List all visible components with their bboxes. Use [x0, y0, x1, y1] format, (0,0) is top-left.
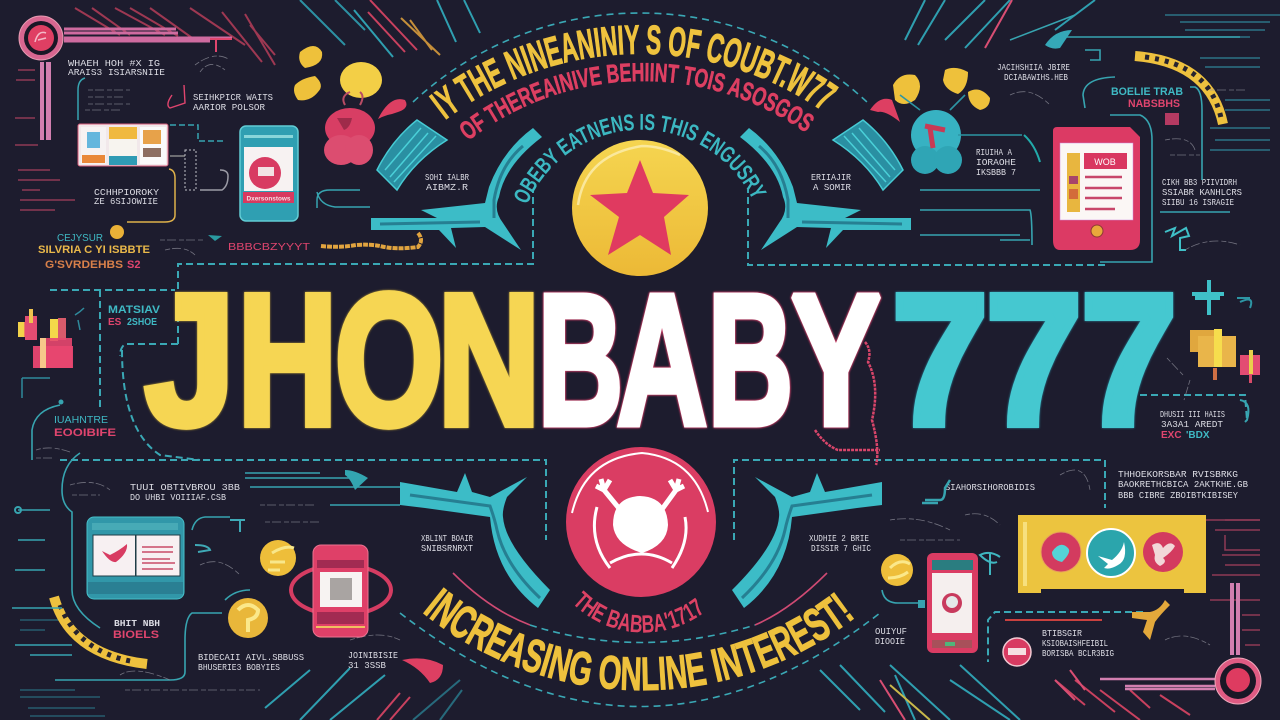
bottom tagline yellow: INCREASING ONLINE INTEREST!: [423, 587, 854, 691]
text block: top right labels: [976, 62, 1242, 208]
red flourish: bottom left: [402, 658, 443, 683]
tablet icon: top right: WOB: [1094, 157, 1116, 167]
yellow blobs and red figure: top left: [294, 46, 382, 165]
target icon: bottom right: [1100, 583, 1261, 704]
micro labels flanking red emblem: [421, 533, 871, 554]
title word: BABY: B: [708, 257, 793, 464]
text block: left mid labels: SILVRIA C YI ISBBTE: [38, 244, 150, 256]
title number: 777: 7: [1081, 257, 1177, 464]
heading arc: red: OF THEREAINIVE BEHIINT TOIS ASOSGOS: [460, 62, 814, 138]
text block: bottom right: SIAHORSIHOROBIDIS: [945, 482, 1035, 493]
text block: top right labels: IKSBBB 7: [976, 167, 1016, 178]
social icon: bird: [1087, 529, 1135, 577]
text block: right of title: EXC: [1161, 430, 1182, 441]
text block: bottom left: 31 3SSB: [348, 660, 386, 671]
dashed connector lines: [50, 190, 1247, 662]
title word: BABY: [538, 257, 881, 464]
text block: left mid labels: ZE 6SIJOWIIE: [94, 196, 158, 207]
swoosh right main: [740, 128, 911, 250]
phone icon: bottom right: [927, 553, 978, 653]
swoosh left main: [371, 128, 542, 250]
yellow knot: bottom right: [1132, 600, 1170, 640]
text block: bottom right: BTIBSGIR: [1042, 628, 1082, 639]
title number: 777: [892, 257, 1177, 464]
text block: bottom right: BBB CIBRE ZBOIBTKIBISEY: [1118, 490, 1238, 501]
text block: top right labels: IORAOHE: [976, 157, 1016, 168]
phone icon: bottom left: [291, 545, 391, 637]
right-of-title decorations: [1160, 280, 1260, 441]
top decorative arc: [413, 13, 867, 102]
title word: JHON: H: [238, 257, 337, 464]
text block: right of title: 'BDX: [1186, 430, 1210, 441]
text block: bottom left: JOINIBISIE: [348, 650, 398, 661]
red leaf: top left: [378, 99, 406, 119]
bar icon: left of title: [18, 309, 73, 368]
cards panel: top left: [78, 124, 168, 166]
heading arc: yellow: IY THE NINEANINIY S OF COUBT.W77: [428, 24, 839, 120]
small icons: top right: [1010, 30, 1245, 250]
text block: bottom left: [113, 482, 398, 673]
text block: top right labels: DCIABAWIHS.HEB: [1004, 72, 1068, 83]
text block: top right labels: SSIABR KANHLCRS: [1162, 187, 1242, 198]
text block: top left labels: [68, 56, 273, 113]
gold coins: bottom left: [228, 540, 296, 638]
connectors top left: [78, 78, 370, 222]
text block: left mid labels: BBBCBZYYYT: [228, 242, 310, 253]
micro label: centre right: ERIIAJIR: [811, 172, 851, 183]
title word: JHON: N: [438, 257, 540, 464]
title word: JHON: O: [335, 257, 443, 464]
text block: top left labels: ARAIS3 ISIARSNIIE: [68, 67, 165, 78]
chain: top left: [321, 233, 421, 248]
title word: BABY: B: [538, 257, 623, 464]
title word: JHON: [145, 257, 540, 464]
swoosh left fan: [377, 120, 447, 190]
red leaf: top right: [870, 99, 900, 122]
text block: bottom left: TUUI OBTIVBROU 3BB: [130, 482, 240, 493]
text block: left of title: 2SHOE: [127, 317, 157, 328]
text block: right of title: 3A3A1 AREDT: [1161, 419, 1223, 430]
decorative rays bottom: [20, 520, 1260, 720]
yellow arrow: bottom left: [54, 597, 147, 664]
phone icon: top left: [240, 126, 298, 221]
text block: left mid labels: S2: [127, 259, 140, 271]
text block: top left labels: AARIOR POLSOR: [193, 102, 265, 113]
title word: JHON: J: [145, 257, 235, 464]
text block: left of title: [22, 304, 161, 460]
swoosh bottom right: [732, 473, 882, 608]
teal swooshes top: [371, 120, 911, 250]
text block: bottom left: BHUSERIE3 BOBYIES: [198, 662, 280, 673]
text block: bottom right: BAOKRETHCBICA 2AKTKHE.GB: [1118, 479, 1248, 490]
text block: bottom left: DO UHBI VOIIIAF.CSB: [130, 492, 226, 503]
text block: left of title: EOOIBIFE: [54, 427, 116, 439]
small teal marks: bottom left: [15, 470, 400, 690]
tablet icon: bottom left: [87, 517, 184, 599]
title word: BABY: Y: [791, 257, 881, 464]
connectors bottom left: [12, 453, 400, 680]
text block: bottom left: BIOELS: [113, 629, 159, 641]
yellow blobs and teal figure: top right: [893, 68, 1040, 174]
micro labels flanking red emblem: XBLINT BOAIR: [421, 533, 473, 544]
connectors top right: [920, 15, 1240, 262]
swoosh bottom left: [400, 473, 550, 608]
text block: bottom right: DIOOIE: [875, 636, 905, 647]
text block: left mid labels: CEJYSUR: [57, 233, 103, 244]
emblem: red circle with horned icon: [566, 447, 716, 597]
bottom tagline red: THE BABBA'1717: [575, 590, 702, 633]
text block: top right labels: CIKH BB3 PIIVIDRH: [1162, 177, 1237, 188]
main title JHONBABY777: [145, 257, 1177, 464]
text block: left mid labels: CCHHPIOROKY: [94, 187, 159, 198]
tablet icon: top right: [1053, 127, 1140, 250]
text block: bottom left: BHIT NBH: [114, 618, 160, 629]
text block: right of title: DHUSII III HAIIS: [1160, 409, 1225, 420]
emblem: gold star coin: [572, 140, 708, 276]
gold coin: bottom right: [881, 554, 925, 608]
target icon: top left: [19, 16, 232, 140]
micro labels flanking red emblem: SNIBSRNRXT: [421, 543, 473, 554]
text block: top left labels: SEIHKPICR WAITS: [193, 92, 273, 103]
text block: right of title: [1160, 409, 1225, 441]
micro labels flanking red emblem: XUDHIE 2 BRIE: [809, 533, 869, 544]
yellow arrow: top right: [1135, 56, 1223, 124]
micro label: centre left second: AIBMZ.R: [426, 182, 468, 193]
swoosh right fan: [833, 120, 903, 190]
micro labels flanking red emblem: DISSIR 7 GHIC: [811, 543, 871, 554]
text block: left of title: ES: [108, 317, 122, 328]
text block: bottom right: OUIYUF: [875, 626, 907, 637]
social icon: heart teal: [1041, 532, 1081, 572]
box icon: right of title: [1190, 329, 1260, 383]
text block: bottom right: THHOEKORSBAR RVISBRKG: [1118, 469, 1238, 480]
title number: 777: 7: [986, 257, 1082, 464]
decorative rays top: [15, 0, 1280, 210]
micro label: centre left: SOHI IALBR: [425, 172, 469, 183]
title number: 777: 7: [892, 257, 988, 464]
text block: left of title: MATSIAV: [108, 304, 161, 316]
text block: top right labels: BOELIE TRAB: [1111, 86, 1183, 98]
text block: bottom right: BORISBA BCLR3BIG: [1042, 648, 1114, 659]
text block: bottom left: BIDECAII AIVL.SBBUSS: [198, 652, 304, 663]
teal swooshes bottom: [400, 473, 882, 608]
red badge: bottom right: [1003, 638, 1031, 666]
text block: top right labels: NABSBHS: [1128, 98, 1180, 110]
text block: top right labels: SIIBU 16 ISRAGIE: [1162, 197, 1234, 208]
text block: bottom right: KSIOBAISHFEIBIL: [1042, 638, 1108, 649]
text block: top left labels: WHAEH HOH #X IG: [68, 58, 160, 69]
text block: top right labels: RIUIHA A: [976, 147, 1012, 158]
bottom-right misc marks: [890, 470, 1260, 700]
phone icon: top left: Dxersonstows: [246, 196, 291, 202]
micro label: centre right second: A SOMIR: [813, 182, 851, 193]
text block: left of title: IUAHNTRE: [54, 415, 108, 426]
heading arc: teal: OBEBY EATNENS IS THIS ENGUSRY: [514, 114, 767, 202]
text block: bottom right: [875, 469, 1248, 659]
social icon: heart: [1143, 532, 1183, 572]
social panel: bottom right: [1018, 515, 1206, 593]
text block: left mid labels: G'SVRDEHBS: [45, 259, 123, 271]
text block: top right labels: JACIHSHIIA JBIRE: [997, 62, 1070, 73]
red squiggle divider right of title: [815, 342, 880, 465]
title word: BABY: A: [617, 257, 707, 464]
text block: left mid labels: [38, 187, 310, 271]
bottom arcs: [400, 573, 880, 706]
